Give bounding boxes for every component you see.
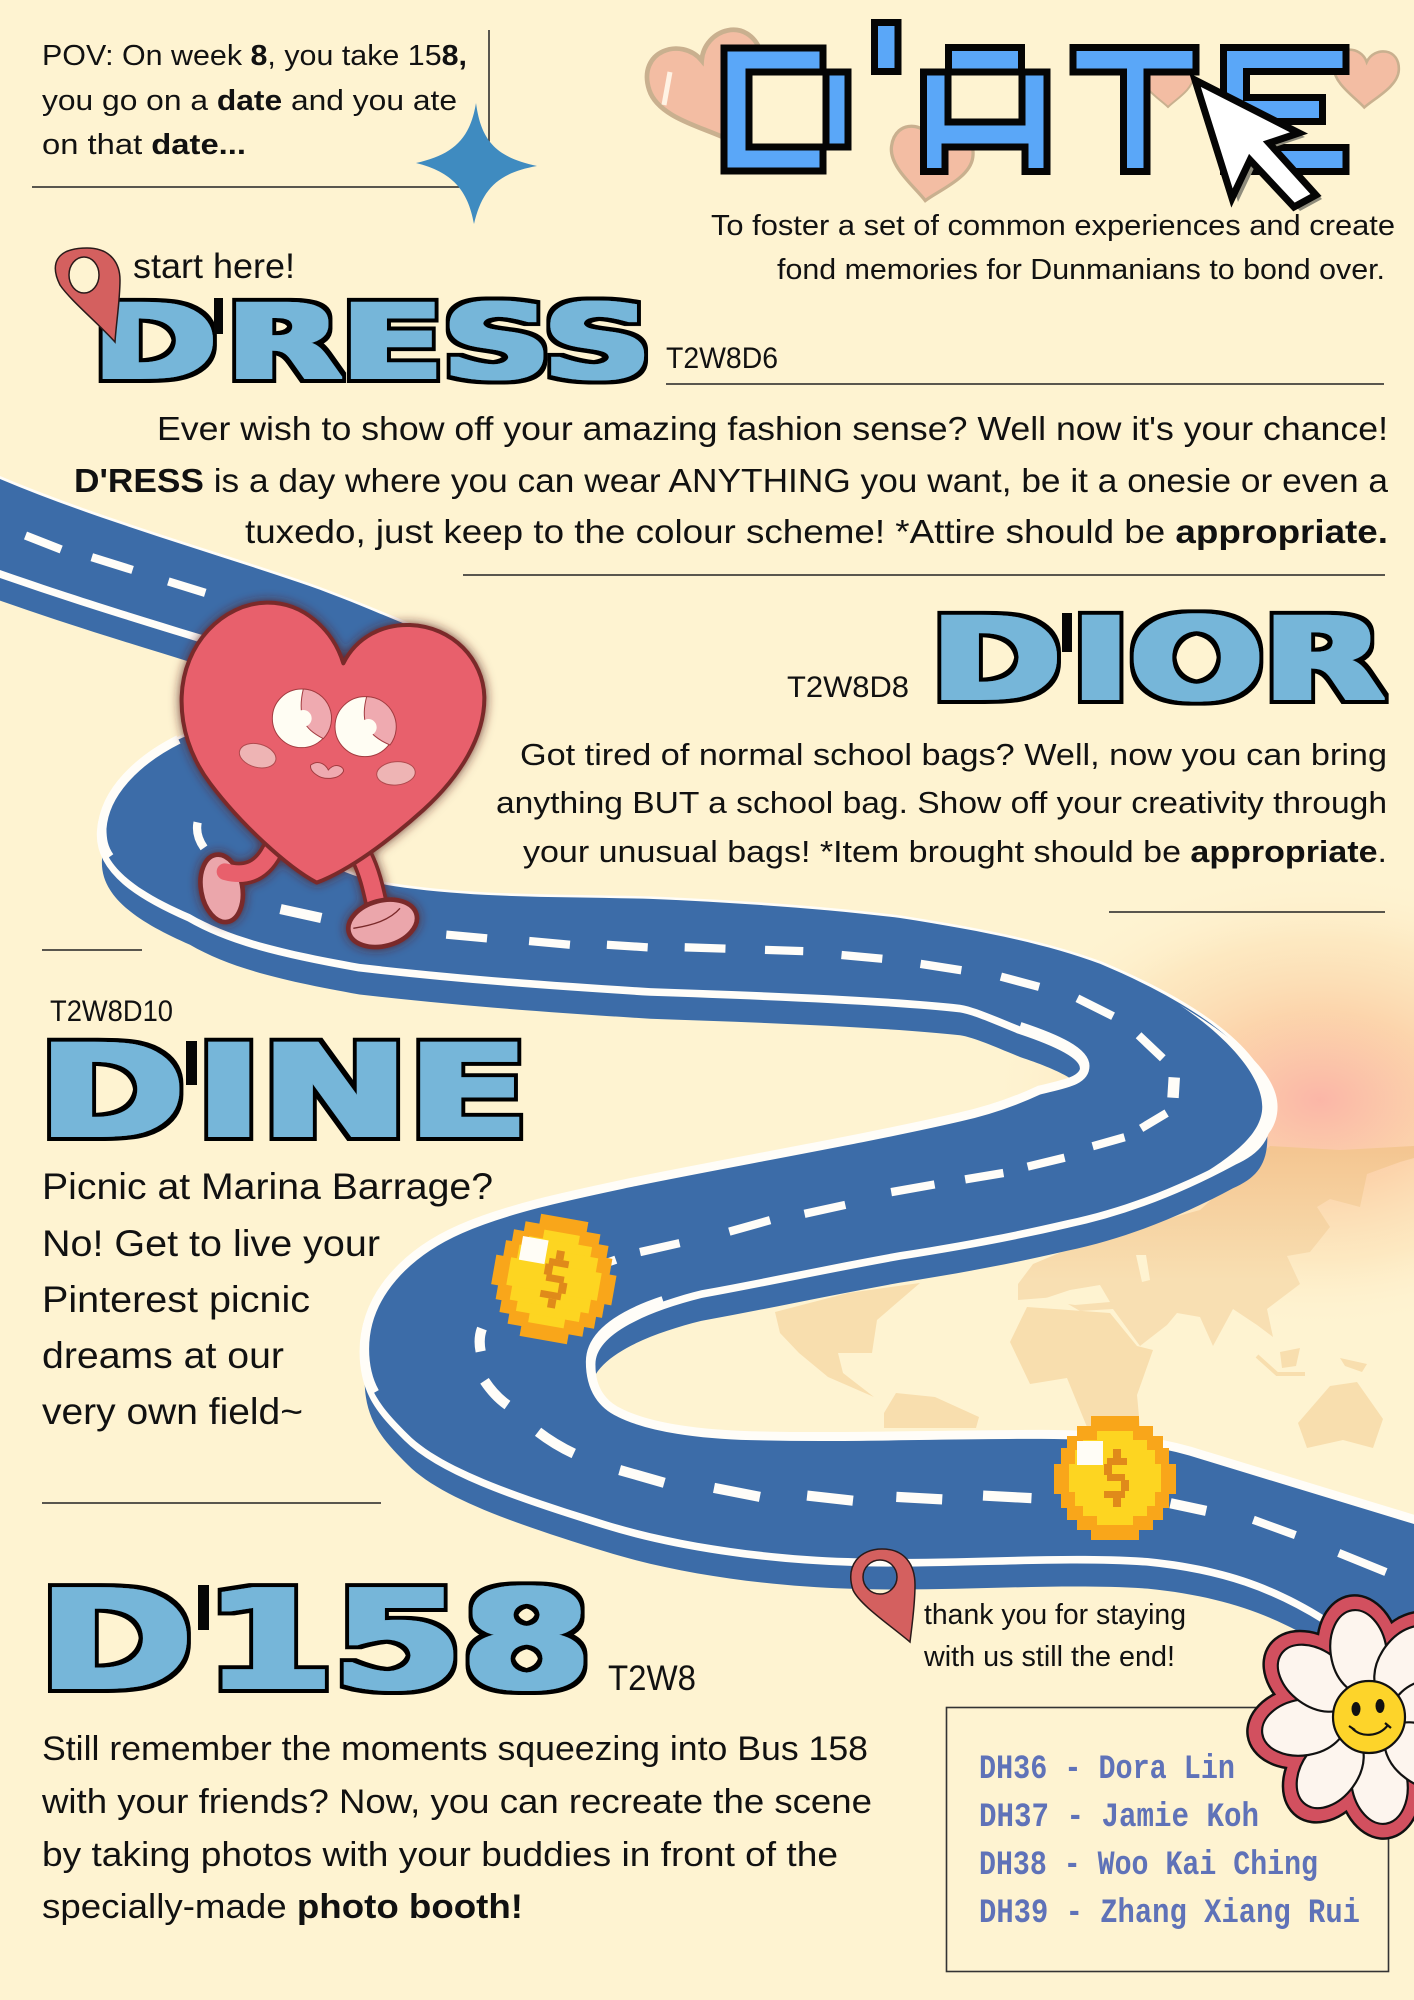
text: D'IOR description: Got tired of normal school bags? Well, now you can bring — [520, 737, 1387, 772]
background glow — [990, 870, 1414, 1330]
start label: start here! — [133, 247, 295, 286]
cheeks — [237, 740, 416, 787]
text: D'INE description: Picnic at Marina Barrage? — [42, 1166, 493, 1207]
icon: smiling flower — [1240, 1588, 1414, 1846]
text: D'IOR description: anything BUT a school bag. Show off your creativity through — [496, 785, 1387, 820]
text: D'158 description — [41, 1730, 872, 1926]
text: D'IOR description: your unusual bags! *Item brought should be appropriate . — [523, 834, 1387, 869]
text: D'INE description: No! Get to live your — [42, 1223, 380, 1264]
subtitle — [711, 210, 1395, 286]
eyes — [272, 689, 396, 757]
subtitle: To foster a set of common experiences and create — [711, 210, 1395, 242]
icon: coin one — [483, 1207, 625, 1351]
right leg and foot — [343, 857, 422, 954]
icon: blue star — [416, 103, 537, 224]
heading: D'158: D '158 — [39, 1562, 591, 1721]
text: D'RESS description: tuxedo, just keep to the colour scheme! *Attire should be appropriate. — [245, 513, 1388, 550]
date: T2W8: T2W8 — [608, 1659, 696, 1698]
mouth — [311, 762, 344, 778]
date: T2W8D10: T2W8D10 — [50, 995, 173, 1028]
thank you note: thank you for staying — [924, 1599, 1186, 1631]
credits box: DH36 - Dora Lin — [979, 1751, 1235, 1789]
date: T2W8D6: T2W8D6 — [666, 342, 778, 375]
body — [182, 603, 484, 883]
text: D'INE description: dreams at our — [42, 1335, 284, 1376]
text: D'RESS description — [74, 410, 1389, 550]
text: you go on a date and you ate — [42, 85, 457, 117]
text: D'158 description: with your friends? Now, you can recreate the scene — [41, 1783, 872, 1821]
heading: D'INE: D 'INE — [39, 1018, 528, 1167]
thank you note: with us still the end! — [923, 1641, 1175, 1673]
text: D'158 description: specially-made photo booth! — [42, 1888, 523, 1926]
text: D'RESS description: Ever wish to show off your amazing fashion sense? Well now it's your chance! — [157, 410, 1388, 447]
text: D'158 description: by taking photos with your buddies in front of the — [42, 1836, 838, 1874]
cursor — [1195, 80, 1322, 211]
text: on that date... — [42, 129, 246, 161]
heart mascot — [182, 603, 484, 954]
heading: D'RESS: D 'RESS — [93, 283, 651, 403]
road — [0, 468, 1414, 1726]
intro text: POV: On week 8, you take 15 8, — [42, 40, 467, 72]
heading: D'IOR: D 'IOR — [931, 593, 1384, 726]
letters — [724, 22, 1346, 172]
thank you note — [923, 1599, 1186, 1673]
credits box — [946, 1708, 1388, 1972]
credits box: DH38 - Woo Kai Ching — [979, 1847, 1318, 1885]
text: D'158 description: Still remember the moments squeezing into Bus 158 — [42, 1730, 868, 1768]
text: D'INE description — [42, 1166, 493, 1432]
icon: start pin — [55, 248, 120, 342]
credits box: DH37 - Jamie Koh — [979, 1799, 1259, 1837]
text: D'INE description: Pinterest picnic — [42, 1279, 310, 1320]
icon: end pin — [851, 1549, 915, 1642]
pixel hearts — [639, 23, 1400, 206]
text: D'RESS description: D'RESS is a day where you can wear ANYTHING you want, be it a onesie or even a — [74, 462, 1389, 499]
text: D'IOR description — [496, 737, 1387, 869]
date: T2W8D8: T2W8D8 — [787, 671, 909, 704]
subtitle: fond memories for Dunmanians to bond over. — [777, 254, 1385, 286]
icon: coin two — [1054, 1416, 1176, 1540]
title: D'ATE with pixel hearts and cursor — [639, 22, 1400, 211]
world map — [775, 1146, 1414, 1448]
text: D'INE description: very own field~ — [42, 1391, 303, 1432]
left leg and foot — [195, 851, 272, 925]
